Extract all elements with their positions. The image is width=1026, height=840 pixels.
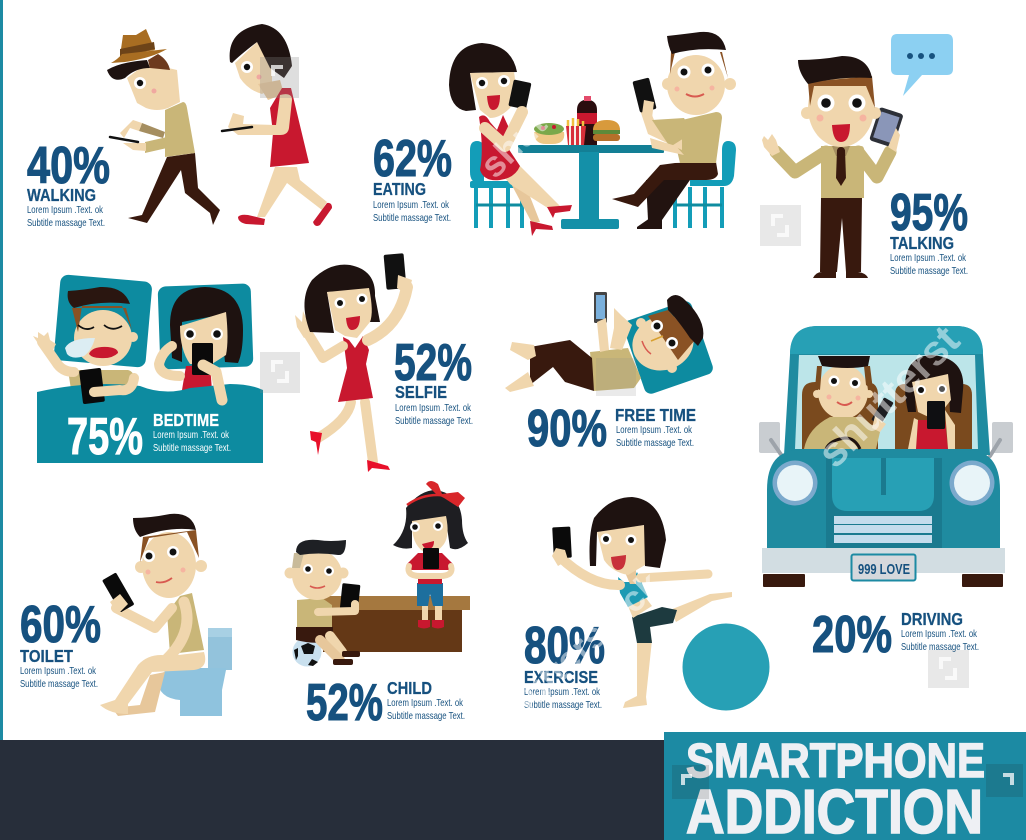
- figure: children on bench: [284, 481, 470, 666]
- figure: car with couple: [759, 326, 1013, 587]
- stat: walking: Lorem Ipsum .Text. ok: [27, 204, 104, 216]
- figure: couple in bed: [33, 274, 263, 466]
- figure: eating couple at table: [449, 32, 736, 236]
- stat: talking: [890, 184, 968, 277]
- title banner: SMARTPHONE: [686, 735, 985, 788]
- stat: toilet: 60%: [20, 596, 101, 654]
- stat: selfie: [394, 334, 473, 427]
- figure: car with couple: 999 LOVE: [858, 561, 910, 578]
- watermark tiles: [260, 57, 1023, 799]
- stat: free time: FREE TIME: [615, 405, 696, 425]
- stat: child: [306, 674, 465, 732]
- stat: free time: Subtitle massage Text.: [616, 437, 694, 449]
- stat: driving: 20%: [812, 606, 892, 664]
- stat: exercise: EXERCISE: [524, 667, 598, 687]
- stat: selfie: Lorem Ipsum .Text. ok: [395, 402, 472, 414]
- stat: exercise: [524, 617, 605, 711]
- stat: child: Lorem Ipsum .Text. ok: [387, 697, 464, 709]
- stat: talking: Subtitle massage Text.: [890, 265, 968, 277]
- stat: bedtime: [153, 410, 231, 454]
- stat: eating: 62%: [373, 130, 452, 188]
- stat: bedtime: Subtitle massage Text.: [153, 442, 231, 454]
- figure: walking woman: [222, 24, 332, 226]
- stat: eating: [373, 130, 452, 224]
- icon: exercise ball: [682, 624, 770, 710]
- stat: eating: EATING: [373, 179, 426, 199]
- stat: driving: DRIVING: [901, 609, 963, 629]
- stat: child: Subtitle massage Text.: [387, 710, 465, 722]
- watermark text: shutterstock: [472, 3, 654, 186]
- stat: walking: [27, 137, 110, 229]
- stat: free time: 90%: [527, 400, 607, 458]
- stat: child: CHILD: [387, 678, 432, 698]
- watermark text: [472, 3, 968, 741]
- footer bar: [0, 740, 664, 840]
- stat: driving: Subtitle massage Text.: [901, 641, 979, 653]
- stat: exercise: Lorem Ipsum .Text. ok: [524, 686, 601, 698]
- figure: selfie woman: [295, 253, 412, 472]
- title banner: [664, 732, 1026, 840]
- stat: eating: Lorem Ipsum .Text. ok: [373, 199, 450, 211]
- figure: talking man: [762, 56, 904, 278]
- stat: selfie: 52%: [394, 334, 472, 392]
- stat: walking: WALKING: [27, 185, 96, 205]
- stat: toilet: [20, 596, 101, 690]
- left edge bar: [0, 0, 3, 740]
- stat: driving: Lorem Ipsum .Text. ok: [901, 628, 978, 640]
- stat: child: 52%: [306, 674, 383, 732]
- stat: exercise: 80%: [524, 617, 605, 675]
- icon: speech bubble: [891, 34, 953, 96]
- stat: selfie: SELFIE: [395, 382, 447, 402]
- figure: man on toilet: [100, 514, 232, 716]
- figure: man lying on pillow: [505, 292, 715, 396]
- stat: walking: 40%: [27, 137, 110, 195]
- watermark text: shutterst: [808, 316, 968, 476]
- stat: toilet: Lorem Ipsum .Text. ok: [20, 665, 97, 677]
- stat: talking: TALKING: [890, 233, 954, 253]
- stat: toilet: TOILET: [20, 646, 73, 666]
- figure: exercise woman: [552, 497, 732, 708]
- stat: walking: Subtitle massage Text.: [27, 217, 105, 229]
- stat: eating: Subtitle massage Text.: [373, 212, 451, 224]
- watermark text: shutterstock: [482, 563, 669, 741]
- stat: talking: 95%: [890, 184, 968, 242]
- stat: toilet: Subtitle massage Text.: [20, 678, 98, 690]
- stat: selfie: Subtitle massage Text.: [395, 415, 473, 427]
- stat: bedtime: BEDTIME: [153, 410, 219, 430]
- stat: talking: Lorem Ipsum .Text. ok: [890, 252, 967, 264]
- stat: exercise: Subtitle massage Text.: [524, 699, 602, 711]
- stat: driving: [812, 606, 979, 664]
- stat: bedtime: Lorem Ipsum .Text. ok: [153, 429, 230, 441]
- stat: free time: Lorem Ipsum .Text. ok: [616, 424, 693, 436]
- figure: walking man: [107, 29, 220, 225]
- figure: couple in bed: 75%: [67, 408, 143, 466]
- stat: free time: [527, 400, 696, 458]
